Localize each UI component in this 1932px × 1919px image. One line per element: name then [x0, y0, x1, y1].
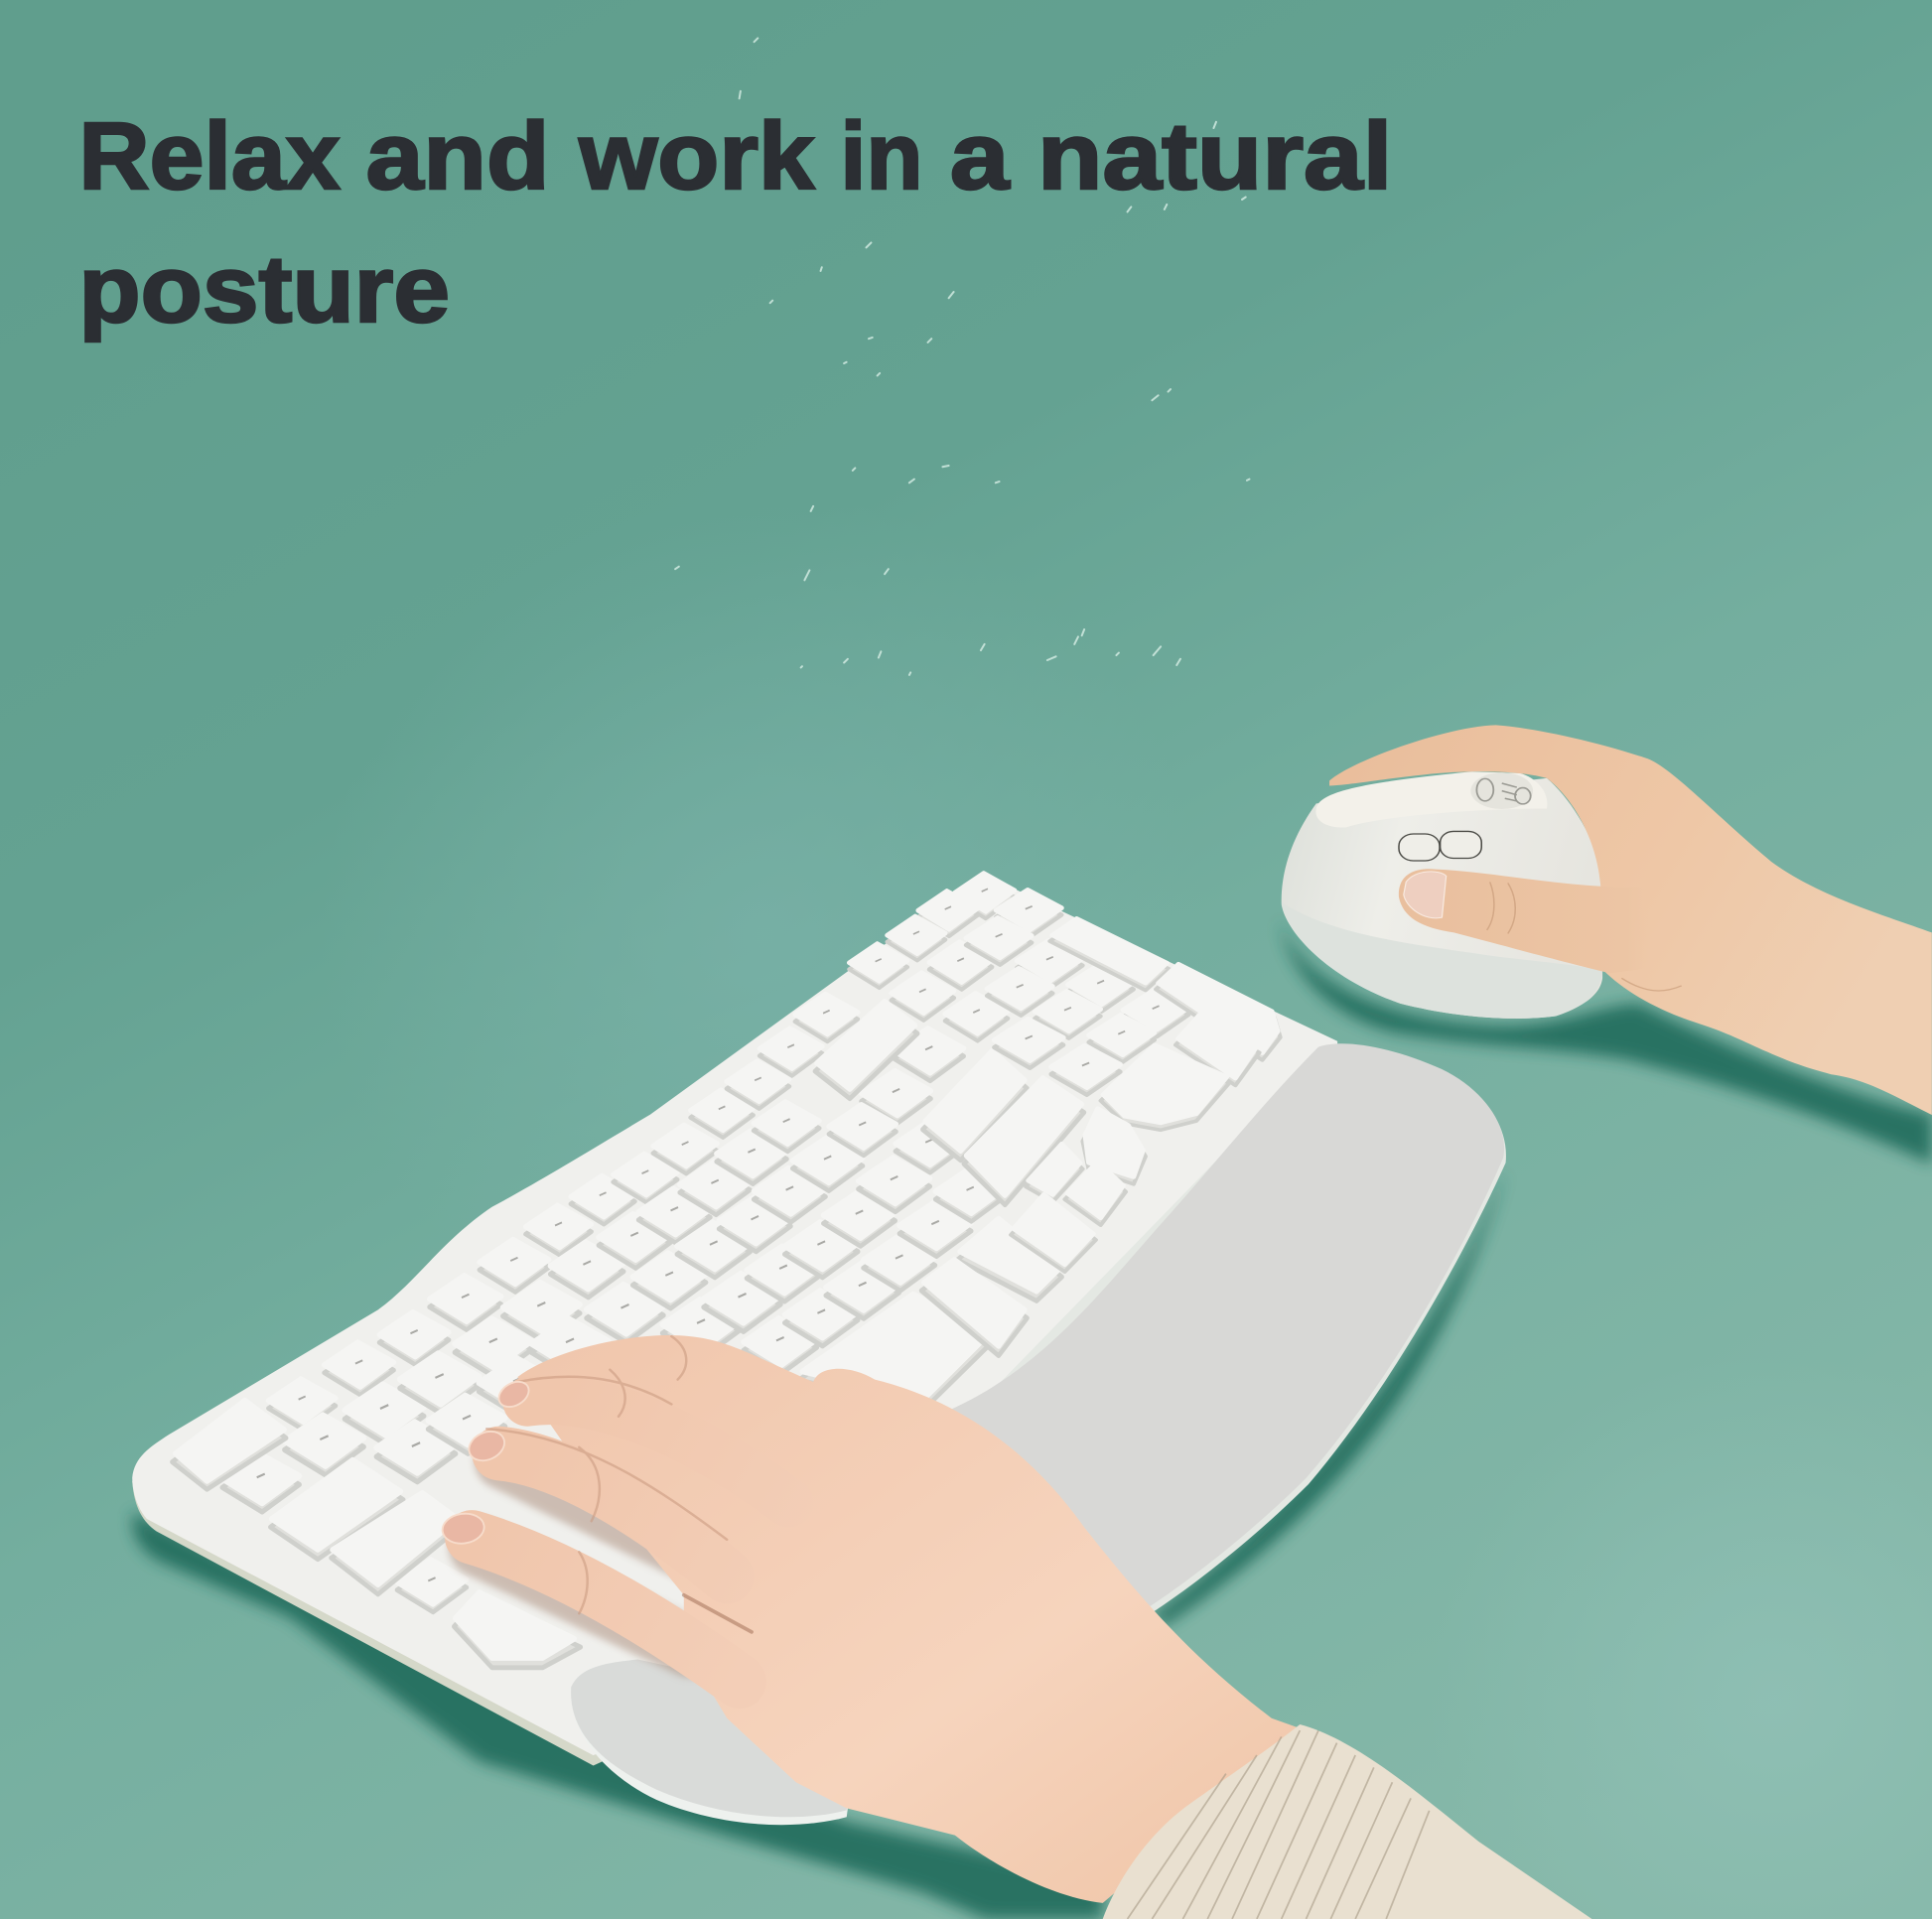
mouse side buttons: [1399, 831, 1481, 861]
mouse: [1282, 771, 1602, 1019]
title: and: [366, 104, 550, 209]
shadows: keyboard, mouse and arms: [133, 917, 1932, 1919]
palm and wrist: [517, 1335, 1307, 1903]
fingers: [472, 1400, 788, 1682]
keyboard right cluster: [966, 890, 1281, 1272]
thumb: [1399, 869, 1652, 973]
standard keys: [268, 1379, 336, 1430]
title: work: [578, 104, 815, 209]
finger creases and knuckles: [486, 1336, 752, 1632]
hand on keyboard: [441, 1335, 1307, 1903]
fingernails: [441, 1377, 533, 1546]
mouse scroll detail: [1470, 772, 1533, 809]
keyboard body: [132, 1056, 1337, 1766]
title: posture: [78, 237, 450, 343]
decorative white specks: [675, 38, 1249, 675]
title: [78, 104, 1392, 343]
finger shadows: [479, 1460, 727, 1648]
mouse lower band: [1282, 902, 1602, 1019]
mouse body: [1282, 778, 1602, 1019]
thumb creases: [1487, 882, 1682, 991]
large keys, left half: [172, 1002, 1084, 1668]
title: Relax: [78, 104, 341, 209]
wrist rest: large: [949, 1043, 1506, 1613]
keyboard: [132, 873, 1337, 1766]
thumbnail: [1404, 872, 1447, 918]
title: in: [840, 104, 923, 209]
fingers over mouse: [1329, 725, 1932, 1115]
title: natural: [1037, 104, 1392, 209]
hand on mouse: [1329, 725, 1932, 1115]
wrist rest: small: [571, 1660, 860, 1825]
title: a: [950, 104, 1010, 209]
mouse top lobe: [1315, 771, 1547, 828]
sleeve: [1103, 1724, 1591, 1919]
